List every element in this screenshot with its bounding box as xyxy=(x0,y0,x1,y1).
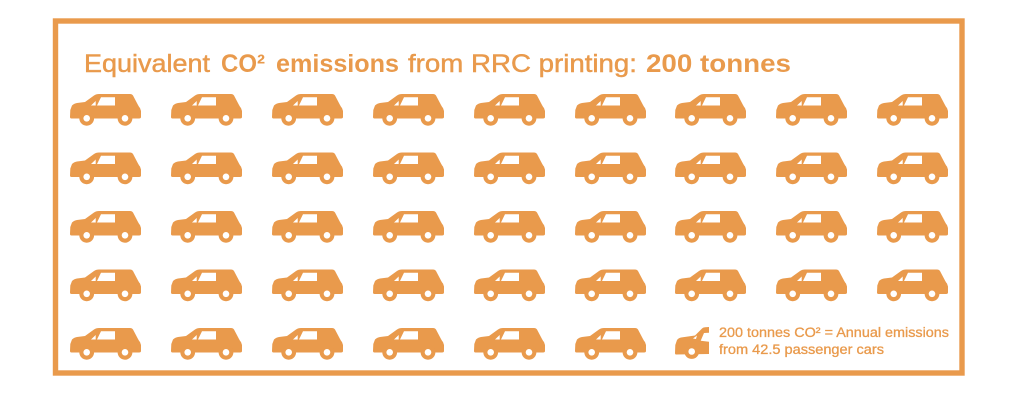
icon: car xyxy=(575,211,646,243)
icon: car xyxy=(272,152,343,184)
icon: car xyxy=(776,211,847,243)
icon: car xyxy=(171,94,242,126)
legend xyxy=(675,325,949,359)
title xyxy=(84,50,791,78)
icon: car xyxy=(877,152,948,184)
icon: car xyxy=(575,152,646,184)
icon: car xyxy=(675,211,746,243)
icon: car xyxy=(575,328,646,360)
title: Equivalent xyxy=(84,50,210,78)
legend text xyxy=(719,325,949,357)
car grid row 2 xyxy=(70,152,948,184)
icon: car xyxy=(70,328,141,360)
icon: car xyxy=(272,328,343,360)
legend text: 200 tonnes CO² = Annual emissions xyxy=(719,325,949,340)
car grid row 5 xyxy=(70,328,646,360)
icon: car xyxy=(776,94,847,126)
title: 200 tonnes xyxy=(646,50,791,78)
icon: car xyxy=(474,211,545,243)
panel: frame xyxy=(56,21,962,373)
icon: partial car xyxy=(675,327,709,359)
icon: car xyxy=(272,270,343,301)
title: CO² xyxy=(221,50,265,78)
icon: car xyxy=(675,270,746,301)
icon: car xyxy=(70,211,141,243)
car grid row 1 xyxy=(70,94,948,126)
icon: car xyxy=(171,152,242,184)
icon: car xyxy=(575,94,646,126)
legend text: from 42.5 passenger cars xyxy=(719,342,884,357)
icon: car xyxy=(877,270,948,301)
icon: car xyxy=(474,328,545,360)
title: emissions xyxy=(276,50,399,78)
icon: car xyxy=(70,94,141,126)
icon: car xyxy=(373,270,444,301)
icon: car xyxy=(171,270,242,301)
icon: car xyxy=(373,152,444,184)
icon: car xyxy=(373,328,444,360)
icon: car xyxy=(675,94,746,126)
icon: car xyxy=(474,270,545,301)
icon: car xyxy=(776,270,847,301)
icon: car xyxy=(272,211,343,243)
title: from RRC printing: xyxy=(408,50,637,78)
icon: car xyxy=(70,152,141,184)
icon: car xyxy=(373,94,444,126)
car grid row 3 xyxy=(70,211,948,243)
icon: car xyxy=(776,152,847,184)
icon: car xyxy=(877,94,948,126)
icon: car xyxy=(575,270,646,301)
icon: car xyxy=(171,211,242,243)
icon: car xyxy=(474,94,545,126)
icon: car xyxy=(877,211,948,243)
icon: car xyxy=(272,94,343,126)
icon: car xyxy=(373,211,444,243)
car grid row 4 xyxy=(70,270,948,301)
icon: car xyxy=(171,328,242,360)
icon: car xyxy=(474,152,545,184)
icon: car xyxy=(675,152,746,184)
icon: car xyxy=(70,270,141,301)
